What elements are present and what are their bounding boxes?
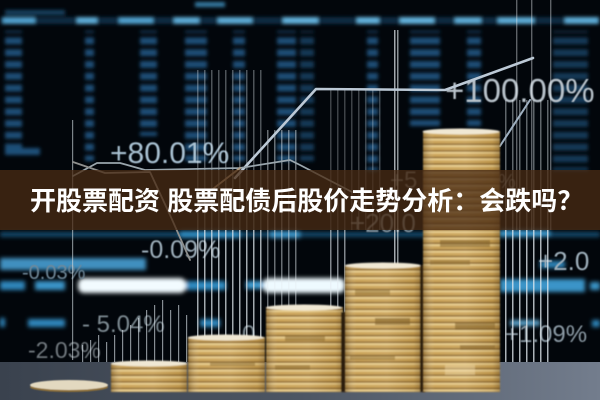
percentage labels: +100.00%: [445, 72, 595, 109]
coin stack 3: [266, 304, 346, 392]
percentage labels: +20.0: [350, 208, 416, 238]
percentage labels: -0.09%: [141, 236, 220, 264]
title banner: [0, 170, 600, 230]
percentage labels: +80.01%: [110, 137, 229, 170]
blurred blue bars: [0, 230, 600, 327]
percentage labels: +5: [390, 167, 417, 194]
coin stack 5: [422, 128, 500, 392]
vertical light streaks: [72, 0, 552, 362]
title: 开股票配资 股票配债后股价走势分析：会跌吗？: [30, 186, 583, 216]
coin stack 1: [111, 360, 187, 392]
percentage labels: -0.03%: [22, 262, 86, 284]
coin stack 4: [345, 262, 425, 392]
rising trend lines: [73, 58, 533, 260]
percentage labels: -2.03%: [28, 337, 101, 363]
coin stack 2: [188, 334, 265, 392]
coin: flat single coin: [30, 380, 108, 392]
percentage labels: - 5.04%: [82, 311, 165, 338]
percentage labels: +1.09%: [505, 321, 587, 348]
percentage labels: +2.0: [538, 246, 589, 276]
data table columns: [0, 2, 600, 171]
grey table surface: [0, 362, 600, 400]
percentage labels: 0: [242, 321, 255, 348]
percentage labels: %: [498, 171, 516, 193]
percentage labels: [22, 72, 595, 363]
